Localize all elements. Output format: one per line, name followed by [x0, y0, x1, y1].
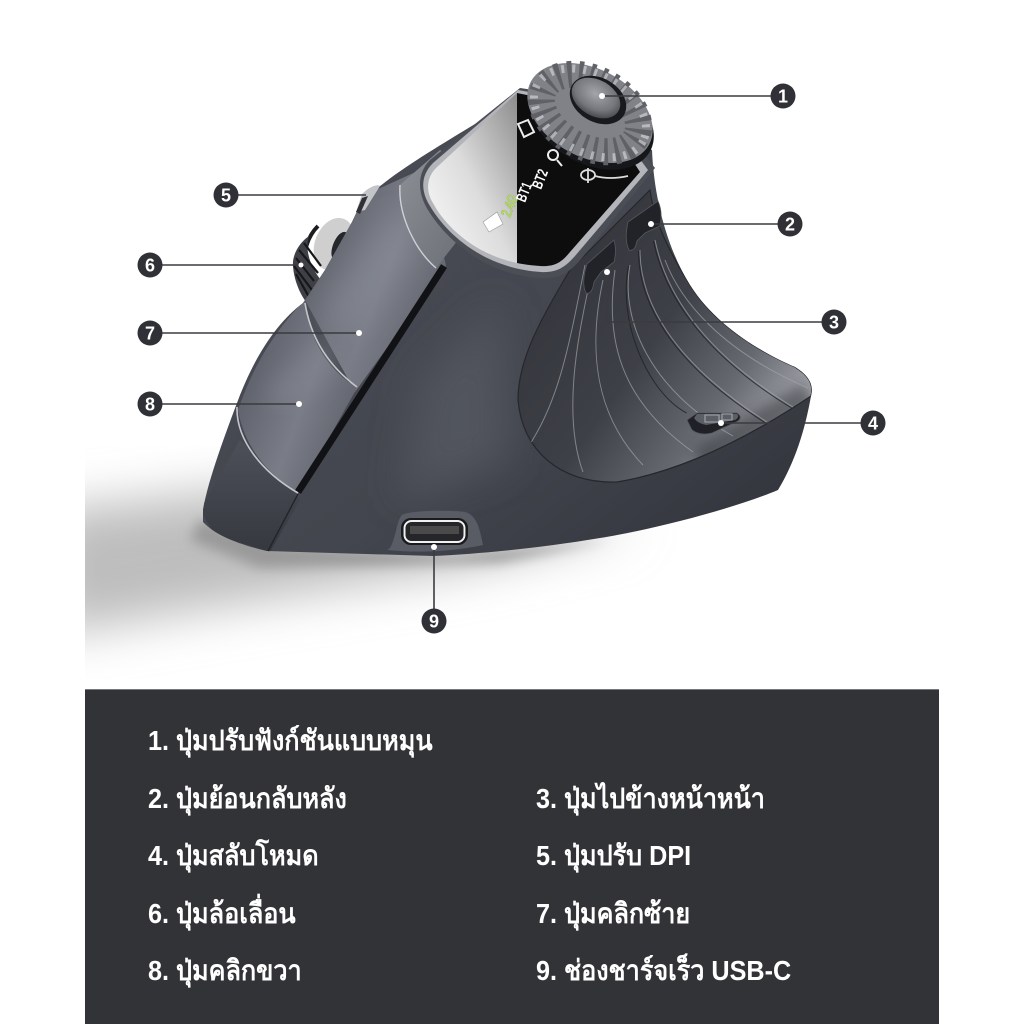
- legend item 8: 8. ปุ่มคลิกขวา: [148, 955, 302, 986]
- floor shadow: [50, 490, 640, 635]
- thumb scoop: [518, 190, 812, 482]
- legend item 5: 5. ปุ่มปรับ DPI: [536, 840, 691, 871]
- callout 4: [718, 410, 886, 436]
- icon: magnifier: [548, 150, 562, 166]
- forward button: [584, 240, 616, 293]
- callout 2: 2: [785, 214, 795, 234]
- callout 3: 3: [829, 312, 839, 332]
- callout 5: 5: [221, 186, 231, 206]
- callout 6: 6: [145, 256, 155, 276]
- legend item 1: 1. ปุ่มปรับฟังก์ชันแบบหมุน: [148, 725, 433, 756]
- right click button surface: [238, 300, 357, 493]
- legend item 9: 9. ช่องชาร์จเร็ว USB-C: [536, 955, 791, 986]
- callout 6: [138, 252, 304, 278]
- callout 1: [599, 84, 796, 108]
- screen labels: 2.4G: [497, 192, 522, 219]
- callout 1: 1: [778, 86, 788, 106]
- icon: target: [581, 168, 628, 183]
- screen labels: [497, 167, 552, 219]
- callout 4: 4: [868, 414, 878, 434]
- callout 9: [422, 544, 446, 634]
- left side upper surface: [300, 170, 446, 392]
- USB-C port: [387, 511, 483, 552]
- callout 2: [648, 212, 802, 236]
- panel: legend: [85, 689, 939, 1024]
- callout 9: 9: [429, 612, 439, 632]
- screen glass: [425, 88, 647, 270]
- back button: [626, 201, 661, 250]
- callout 7: [138, 320, 362, 346]
- legend item 7: 7. ปุ่มคลิกซ้าย: [536, 898, 690, 929]
- legend item 2: 2. ปุ่มย้อนกลับหลัง: [148, 783, 347, 814]
- front face shading: [200, 300, 510, 552]
- legend item 4: 4. ปุ่มสลับโหมด: [148, 840, 319, 871]
- mode switch button: [687, 413, 740, 434]
- rotary dial: [510, 43, 671, 190]
- callout 5: [214, 182, 366, 208]
- bezel highlight line: [400, 185, 436, 268]
- callout 8: 8: [145, 394, 155, 414]
- callout 7: 7: [145, 324, 155, 344]
- scroll wheel: [293, 212, 362, 312]
- screen bezel: [420, 88, 655, 278]
- mouse body: [200, 92, 812, 556]
- icon: camera: [518, 120, 534, 137]
- right click button edge: [237, 407, 298, 493]
- icon: menu box: [483, 212, 503, 232]
- callout 3: [604, 269, 846, 334]
- top bezel and screen: [400, 88, 655, 278]
- mouse illustration with callouts: [85, 60, 886, 654]
- legend item 3: 3. ปุ่มไปข้างหน้าหน้า: [536, 783, 765, 814]
- DPI button: [356, 185, 380, 214]
- seam between buttons and body: [298, 266, 444, 492]
- base seam: [268, 494, 298, 551]
- screen labels: BT2: [528, 167, 552, 191]
- left click button edge: [305, 303, 357, 387]
- legend item 6: 6. ปุ่มล้อเลื่อน: [148, 898, 296, 929]
- screen labels: BT1: [512, 180, 536, 204]
- bezel side surface: [400, 150, 470, 268]
- callout 8: [138, 392, 302, 416]
